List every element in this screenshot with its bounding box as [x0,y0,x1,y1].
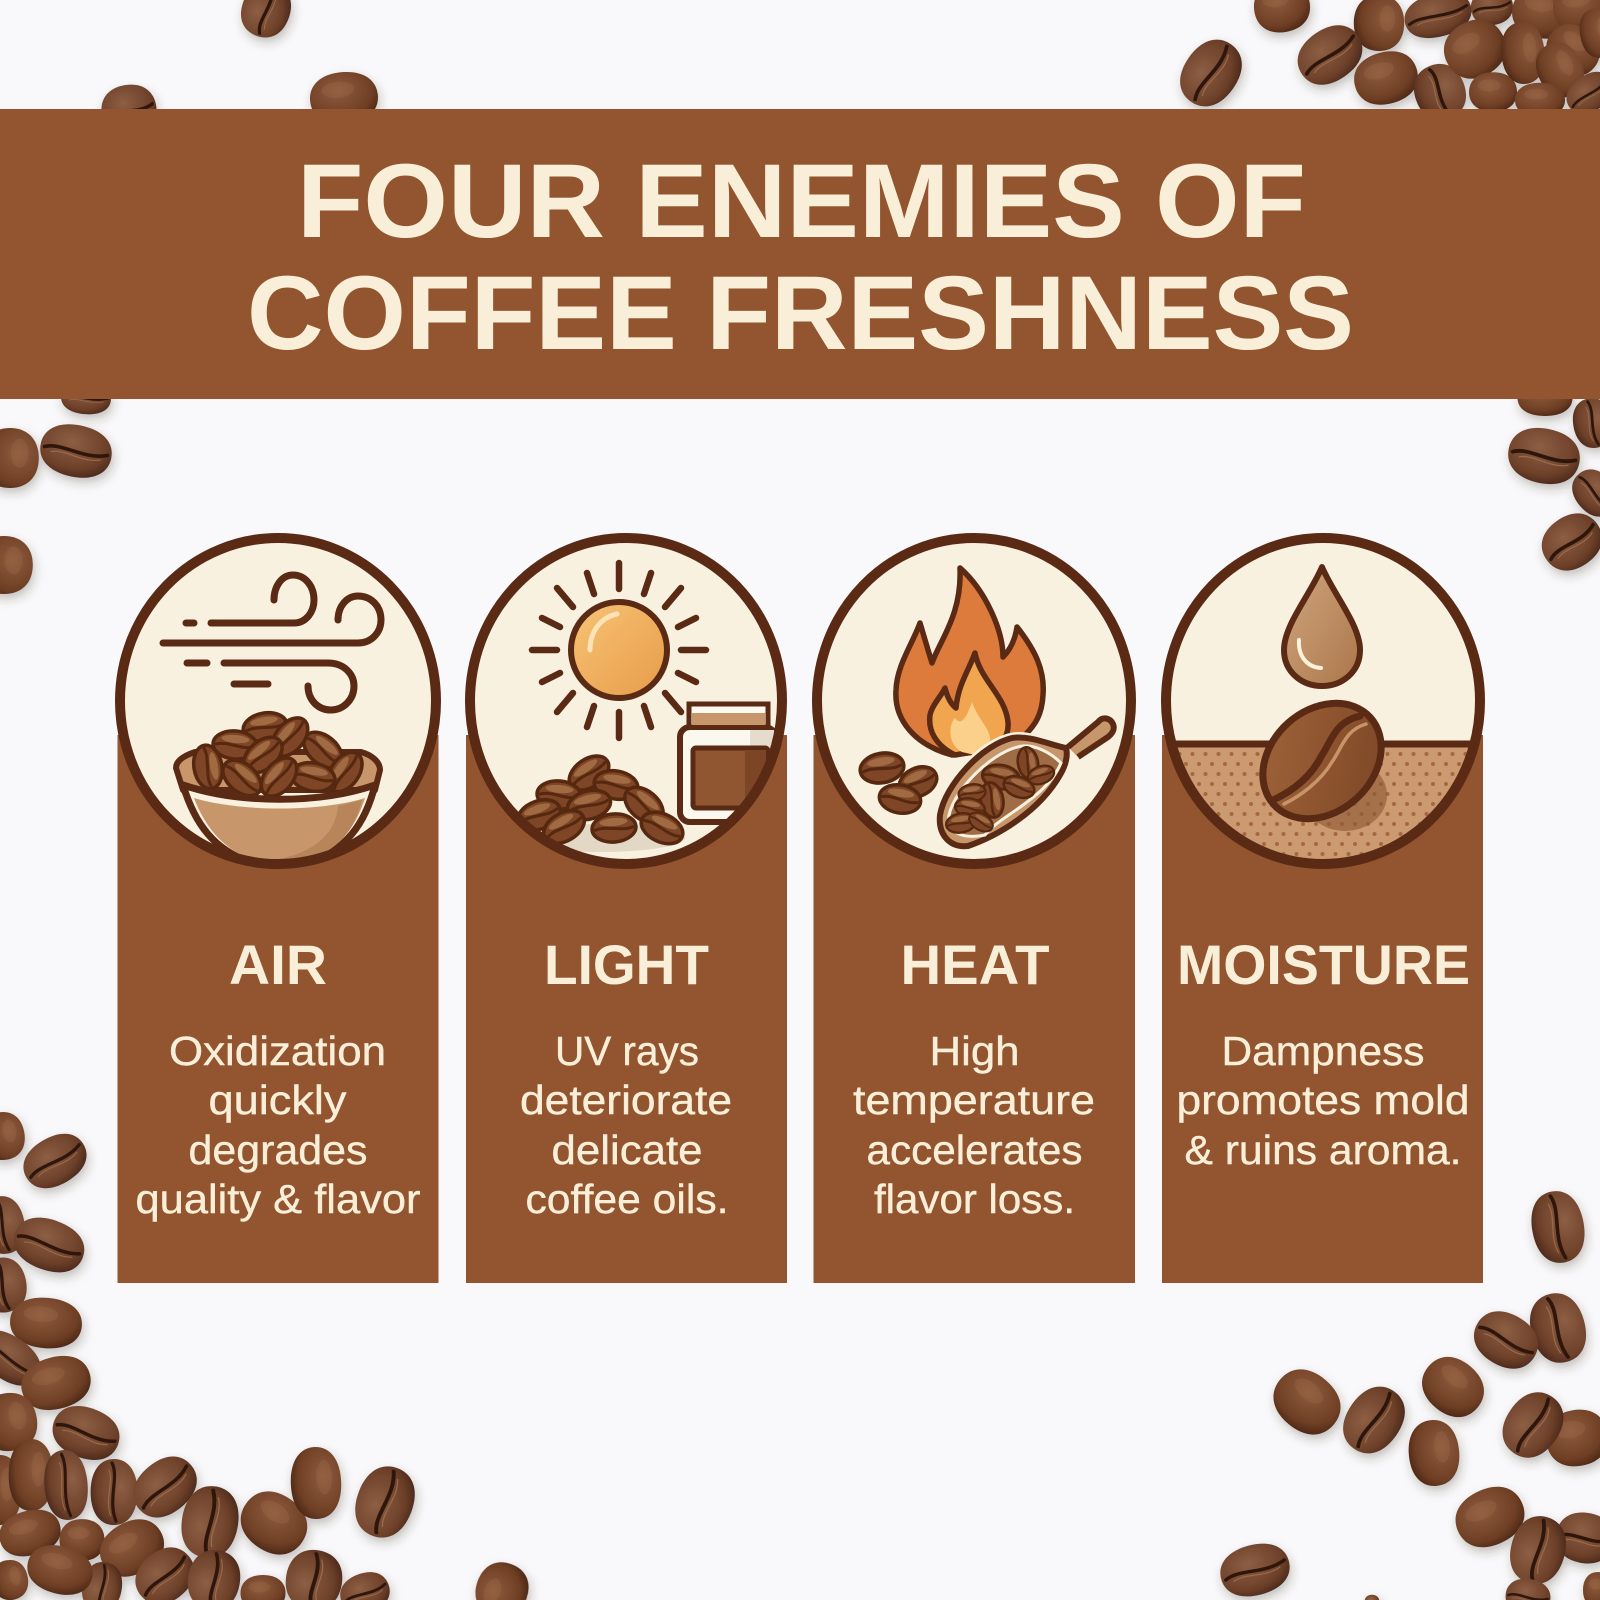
heat description: accelerates [866,1127,1082,1173]
light description: deteriorate [520,1077,732,1123]
icon: loose beans [858,750,942,816]
heat heading: HEAT [900,933,1050,996]
moisture description: promotes mold [1176,1077,1470,1123]
icon: scoop of beans [935,718,1114,851]
air description: Oxidization [169,1028,386,1074]
icon: wind [163,575,381,710]
light icon circle [470,538,782,864]
air description [136,1028,420,1222]
coffee beans: left middle [0,380,117,594]
moisture icon circle [1160,538,1490,874]
moisture description [1176,1028,1470,1173]
coffee beans: top left [98,0,380,140]
icon: coffee bean [1240,680,1404,842]
air description: quality & flavor [136,1176,420,1222]
air description: quickly [208,1077,347,1123]
light description: coffee oils. [526,1176,728,1222]
icon: soaked ground [1176,740,1470,859]
title banner [0,109,1600,399]
air heading: AIR [229,933,327,996]
heat description: temperature [853,1077,1095,1123]
coffee beans: top right [1169,0,1600,127]
air icon circle [120,538,436,864]
icon: jar and beans [514,704,775,852]
panel: moisture [1160,538,1490,1283]
coffee beans: bottom left [0,1109,536,1600]
moisture heading: MOISTURE [1177,933,1470,996]
icon: flame [896,568,1043,755]
light description: delicate [552,1127,702,1173]
moisture description: Dampness [1222,1028,1424,1074]
panel: air [118,538,438,1283]
heat description [853,1028,1095,1222]
icon: bowl of beans [176,709,380,862]
title [247,143,1354,372]
icon: water drop [1284,567,1360,686]
title: COFFEE FRESHNESS [247,255,1354,372]
panel: heat [814,538,1135,1283]
icon: sun [532,563,706,738]
heat icon circle [817,538,1131,864]
moisture description: & ruins aroma. [1184,1127,1462,1173]
light description [520,1028,732,1222]
panel: light [466,538,787,1283]
light description: UV rays [555,1028,699,1074]
air description: degrades [188,1127,368,1173]
coffee beans: right middle [1503,380,1600,581]
light heading: LIGHT [544,933,709,996]
title: FOUR ENEMIES OF [297,143,1306,260]
heat description: flavor loss. [874,1176,1075,1222]
coffee beans: bottom right [1215,1187,1600,1600]
heat description: High [930,1028,1020,1074]
